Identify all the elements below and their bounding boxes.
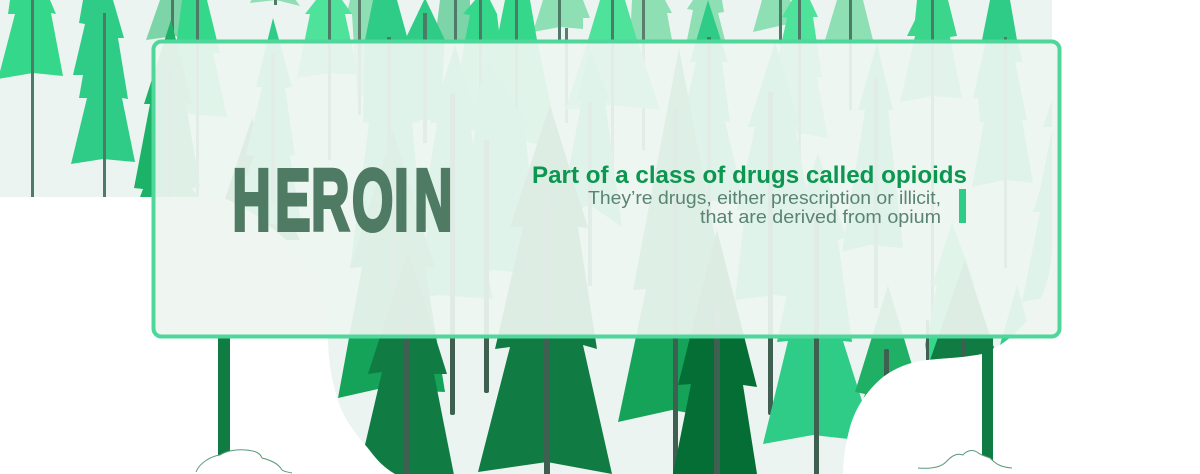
description text: They’re drugs, either prescription or illicit,	[588, 187, 941, 208]
back row trees	[146, 0, 932, 150]
middle row trees	[406, 42, 903, 415]
snow mound right	[918, 451, 1012, 468]
front row trees	[338, 48, 1028, 474]
billboard post left	[218, 336, 230, 460]
subtitle heading: Part of a class of drugs called opioids	[532, 162, 967, 189]
accent bar	[959, 189, 966, 223]
upper row trees	[0, 0, 1060, 330]
description text	[588, 187, 941, 227]
billboard post right	[982, 336, 993, 464]
sign panel	[154, 42, 1060, 336]
title: HEROIN: HEROIN	[232, 153, 453, 249]
snow mound left	[196, 450, 292, 473]
description text: that are derived from opium	[700, 206, 941, 227]
